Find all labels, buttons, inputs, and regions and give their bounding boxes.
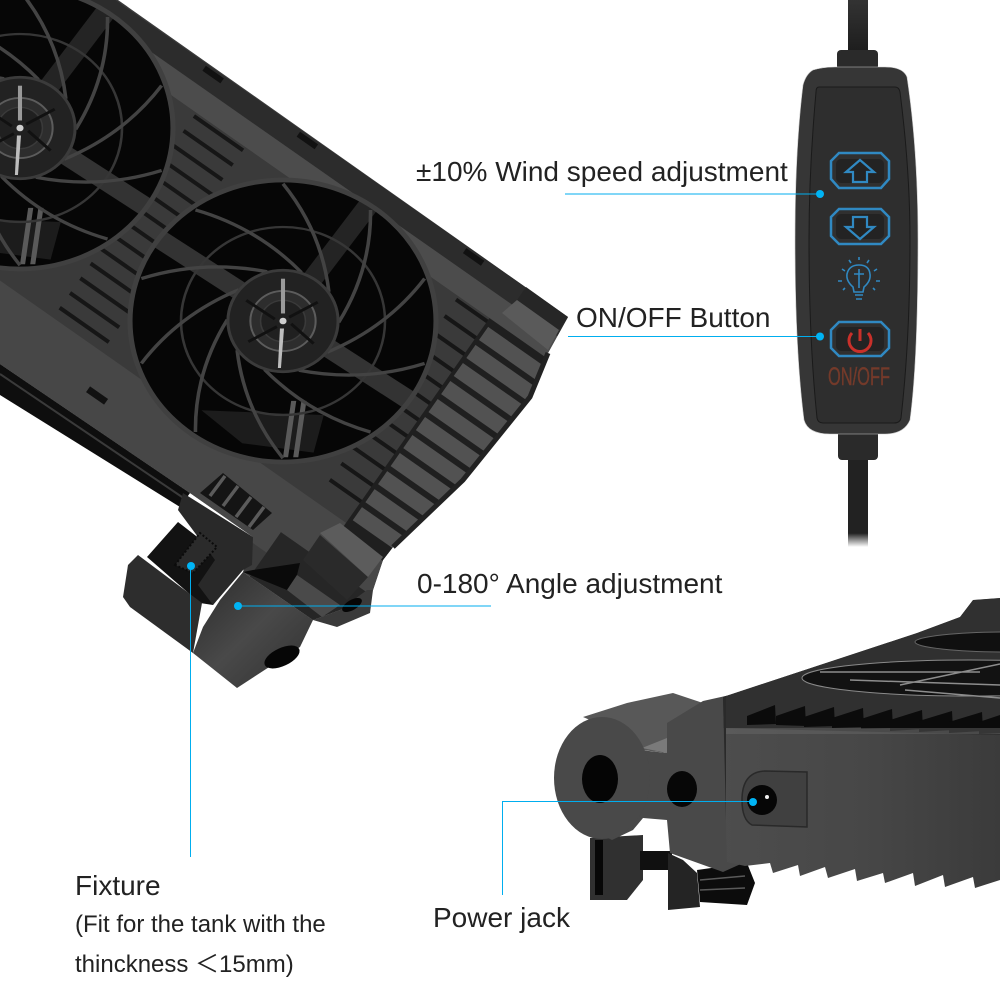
photo: fan unit from above — [0, 0, 568, 688]
small hole — [667, 771, 697, 807]
lower textured strip — [287, 575, 340, 617]
left clamp jaw — [590, 835, 643, 900]
ON/OFF print: ON/OFF — [828, 363, 890, 391]
black channel — [243, 563, 300, 590]
clamp screw — [640, 851, 672, 870]
fan: right — [127, 180, 439, 462]
textured block — [320, 523, 383, 577]
icon: light bulb — [838, 257, 880, 299]
ribbed knob — [200, 473, 272, 530]
pivot hole — [261, 641, 303, 673]
black base strip — [0, 364, 190, 507]
label: Fixture — [75, 870, 161, 901]
leader line — [502, 802, 753, 895]
leader line — [568, 336, 820, 338]
controller inner panel — [809, 87, 910, 423]
pivot cylinder — [193, 572, 313, 688]
neck notch highlight — [642, 738, 667, 753]
textured block dark side — [303, 535, 368, 600]
leader line — [565, 193, 820, 195]
large hole — [582, 755, 618, 803]
round end — [554, 717, 650, 839]
unit body — [720, 590, 1000, 900]
knob — [697, 863, 755, 905]
inline controller — [795, 0, 918, 547]
mounting slots — [86, 66, 484, 404]
clamp screw — [175, 533, 217, 573]
sub label: thinckness ＜15mm) — [75, 951, 294, 978]
lower clamp jaw — [123, 555, 202, 653]
sub label — [75, 911, 326, 978]
body shell — [0, 0, 568, 620]
button: speed up — [831, 153, 889, 188]
button: power — [831, 322, 889, 356]
end plate with neck — [580, 695, 743, 872]
rear cylinder — [583, 693, 703, 753]
power jack socket — [747, 785, 777, 815]
leader dot — [816, 190, 824, 198]
label: ON/OFF Button — [576, 302, 770, 333]
leader dot — [187, 562, 195, 570]
controller shell — [795, 67, 918, 434]
sub label: (Fit for the tank with the — [75, 911, 326, 938]
callout: angle — [234, 568, 723, 610]
leader line — [238, 605, 491, 607]
leader dot — [816, 332, 824, 340]
cable: top — [848, 0, 868, 55]
callout: power jack — [433, 798, 757, 933]
callout: on/off — [568, 302, 824, 340]
cable: bottom — [848, 455, 868, 547]
power jack plate — [742, 771, 807, 827]
label: Power jack — [433, 902, 571, 933]
button: speed down — [831, 209, 889, 244]
tip textured block — [502, 300, 559, 350]
textured end ribs — [344, 318, 544, 561]
grille slats — [747, 705, 1000, 734]
fan: left — [0, 0, 176, 269]
body surface bands and ribs — [0, 0, 568, 620]
tab hole — [340, 595, 364, 615]
clamp upper block — [178, 493, 253, 605]
callout: wind speed — [416, 156, 824, 198]
label: ±10% Wind speed adjustment — [416, 156, 788, 187]
label: 0-180° Angle adjustment — [417, 568, 723, 599]
right edge shell — [393, 353, 548, 547]
tip cap — [517, 287, 568, 330]
leader dot — [234, 602, 242, 610]
collar: top — [837, 50, 878, 70]
leader dot — [749, 798, 757, 806]
callout: fixture — [75, 562, 326, 978]
right clamp jaw — [668, 853, 700, 910]
photo: fan unit side view — [554, 590, 1000, 910]
rear end tab — [313, 590, 373, 627]
collar: bottom — [838, 430, 878, 460]
dark clamp interior — [147, 522, 240, 605]
leader line — [190, 566, 192, 857]
